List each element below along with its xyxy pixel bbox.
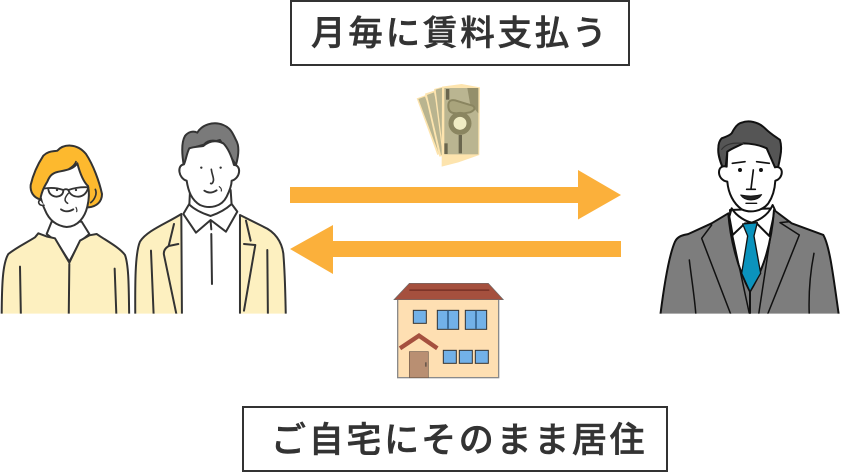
man hair [182, 123, 238, 167]
agent suit right [750, 210, 840, 323]
man collar [183, 204, 237, 233]
person: man in cream jacket [135, 123, 286, 323]
woman top [2, 233, 129, 323]
man face [179, 141, 239, 207]
person: woman with glasses [2, 146, 129, 323]
windows [413, 310, 488, 363]
heading box: monthly rent payment: 月毎に賃料支払う [311, 15, 609, 53]
agent neck and shirt [729, 207, 770, 214]
agent face [719, 143, 782, 211]
agent suit left [659, 213, 750, 323]
house wall [398, 299, 499, 378]
agent hair [718, 121, 781, 173]
man facial features [200, 166, 222, 193]
arrow: left, housing [290, 225, 621, 274]
man jacket left [135, 214, 182, 323]
agent facial features [732, 162, 769, 203]
porch roof [400, 336, 437, 348]
door [409, 352, 428, 378]
heading box: continue living at home: ご自宅にそのまま居住 [271, 421, 647, 460]
icon: house [394, 283, 503, 378]
man neck [189, 190, 232, 222]
man jacket right [240, 215, 286, 323]
woman glasses [43, 187, 88, 197]
icon: banknotes [417, 84, 480, 167]
woman facial features [56, 189, 77, 212]
woman neck [47, 222, 89, 262]
person: agent in grey suit [659, 121, 840, 323]
agent collar [729, 205, 775, 236]
agent tie [742, 223, 761, 292]
heading box: continue living at home [243, 407, 667, 471]
arrow: right, rent payment [290, 170, 621, 220]
house roof [394, 283, 503, 300]
heading box: monthly rent payment [291, 1, 629, 65]
woman face [41, 163, 89, 227]
man shirt [182, 213, 240, 323]
woman hair [31, 146, 102, 207]
